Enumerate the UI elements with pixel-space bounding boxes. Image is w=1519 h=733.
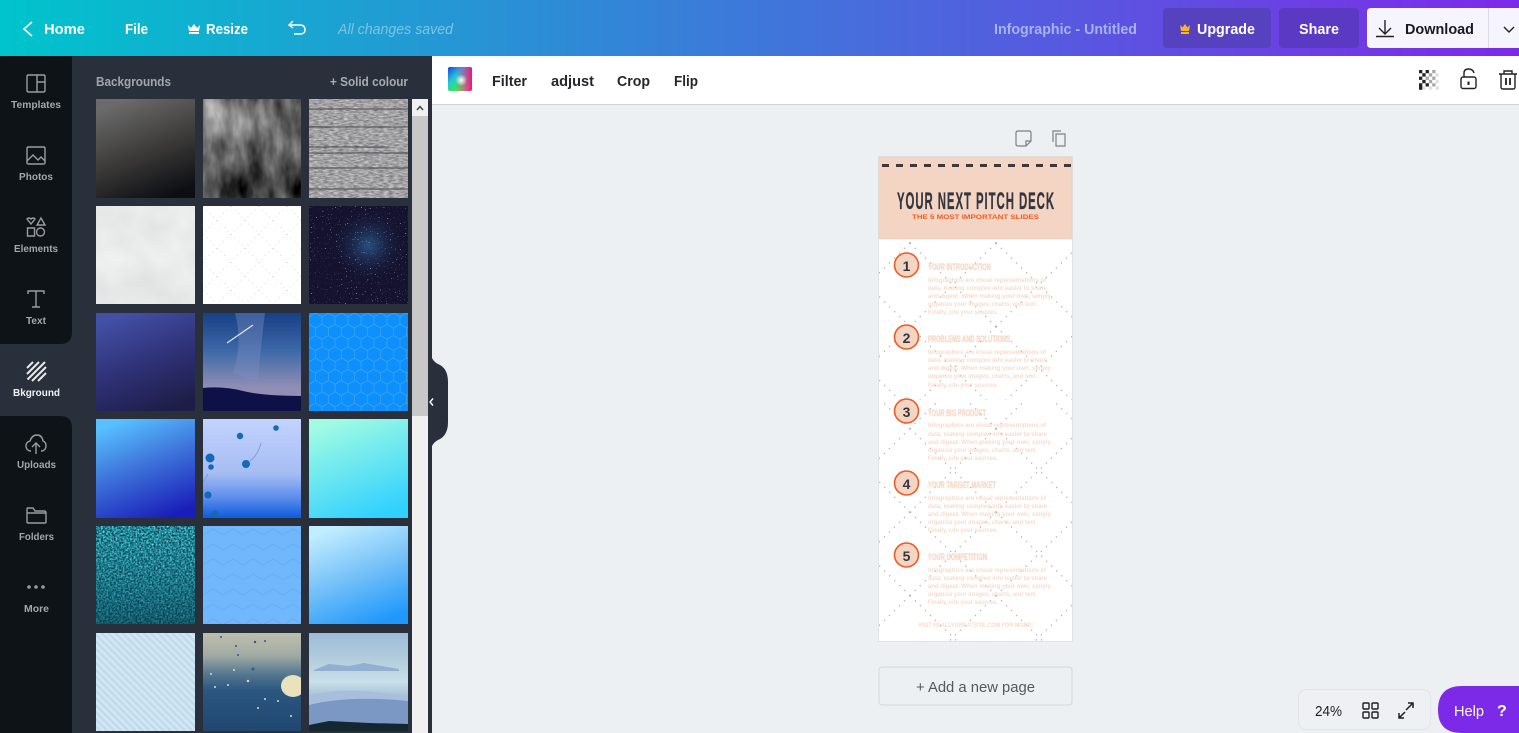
upgrade button: Upgrade (1197, 22, 1255, 38)
icon: text (28, 291, 44, 307)
share button: Share (1299, 22, 1339, 38)
infographic canvas (878, 156, 1072, 642)
thumb: wood planks (309, 99, 408, 198)
thumb: pale stripes (96, 633, 195, 731)
step 4: YOUR TARGET MARKET (928, 480, 996, 491)
subtitle: THE 5 MOST IMPORTANT SLIDES (912, 214, 1040, 221)
step 4: organize your images, charts, and text. (928, 519, 1037, 526)
templates label: Templates (11, 99, 61, 111)
panel collapse handle (430, 358, 448, 446)
thumb: jellyfish (203, 419, 301, 518)
icon: fullscreen (1399, 703, 1413, 718)
icon: elements (27, 218, 45, 236)
help button: Help (1454, 704, 1484, 720)
icon: grid view (1363, 703, 1378, 718)
thumb: white marble (96, 206, 195, 304)
left sidebar (0, 56, 72, 733)
zoom level: 24% (1315, 704, 1342, 720)
step 5: and digest. When making your own, simply (928, 583, 1052, 590)
folders label: Folders (19, 531, 54, 543)
step 4: Finally, cite your sources. (928, 527, 998, 534)
step 4: data, making complex info easier to share (928, 503, 1048, 510)
step 2: organize your images, charts, and text. (928, 373, 1037, 380)
step 1: data, making complex info easier to share (928, 285, 1048, 292)
background thumbnail grid (96, 99, 408, 731)
thumb: misty mountains (309, 633, 408, 731)
image toolbar (432, 56, 1519, 105)
step 3: 3 (903, 404, 911, 420)
step 5: organize your images, charts, and text. (928, 591, 1037, 598)
icon: photos (27, 147, 45, 164)
infographic canvas: YOUR NEXT PITCH DECK (897, 188, 1055, 215)
resize menu: Resize (206, 22, 248, 38)
icon: back chevron (24, 22, 32, 36)
thumb: grey clouds (203, 99, 301, 198)
dashed rule (882, 164, 1072, 167)
zoom controls (1298, 690, 1430, 730)
add a new page button (879, 667, 1072, 705)
top navigation bar (0, 0, 1519, 56)
document title: Infographic - Untitled (994, 22, 1137, 38)
icon: templates (27, 75, 45, 92)
icon: uploads (26, 435, 46, 454)
step 2 (894, 325, 1052, 389)
panel scrollbar (412, 99, 428, 733)
step 4: Infographics are visual representations of (928, 495, 1047, 502)
step 2: and digest. When making your own, simply (928, 365, 1052, 372)
step 1: Finally, cite your sources. (928, 309, 998, 316)
icon: undo arrow (289, 21, 305, 34)
thumb: raindrops (203, 633, 301, 731)
icon: lock (1461, 69, 1476, 88)
step 3: and digest. When making your own, simply (928, 439, 1052, 446)
step 4: and digest. When making your own, simply (928, 511, 1052, 518)
step 2: PROBLEMS AND SOLUTIONS (928, 334, 1010, 345)
thumb: starfield (309, 206, 408, 304)
icon: duplicate page (1053, 131, 1065, 146)
thumb: dark gradient (96, 99, 195, 198)
step 2: data, making complex info easier to share (928, 357, 1048, 364)
thumb: night sky with hill (203, 313, 301, 411)
thumb: sky gradient (309, 526, 408, 624)
download button (1367, 8, 1519, 48)
step 3: Finally, cite your sources. (928, 455, 998, 462)
solid colour link: + Solid colour (330, 74, 408, 89)
thumb: teal sparkle water (96, 526, 195, 624)
thumb: light blue chevrons (203, 526, 301, 624)
thumb: blue hexagons (309, 313, 408, 411)
filter button: Filter (492, 74, 527, 90)
step 1: organize your images, charts, and text. (928, 301, 1037, 308)
thumb: aqua gradient (309, 419, 408, 518)
thumb: blue gradient (96, 419, 195, 518)
step 5: YOUR COMPETITION (928, 552, 987, 563)
icon: trash (1499, 71, 1517, 89)
backgrounds heading: Backgrounds (96, 74, 171, 89)
flip button: Flip (674, 74, 698, 90)
step 5: Infographics are visual representations of (928, 567, 1047, 574)
save status: All changes saved (337, 22, 454, 38)
icon: folders (27, 508, 46, 523)
step 2: 2 (903, 330, 911, 346)
step 5 (894, 543, 1052, 606)
step 3: YOUR BIG PRODUCT (928, 408, 986, 419)
icon: transparency checker (1419, 70, 1439, 90)
step 5: Finally, cite your sources. (928, 599, 998, 606)
icon: background stripes (27, 362, 46, 381)
add a new page button: + Add a new page (916, 680, 1035, 696)
step 1: Infographics are visual representations of (928, 277, 1047, 284)
step 1 (894, 253, 1052, 316)
thumb: white diamonds (203, 206, 301, 304)
step 2: Finally, cite your sources. (928, 382, 998, 389)
step 3: Infographics are visual representations of (928, 422, 1047, 429)
uploads label: Uploads (17, 459, 56, 471)
header band (879, 157, 1072, 239)
step 1: and digest. When making your own, simply (928, 293, 1052, 300)
step 5: data, making complex info easier to share (928, 575, 1048, 582)
file menu: File (125, 22, 148, 38)
step 3: data, making complex info easier to share (928, 431, 1048, 438)
icon: resize crown (188, 24, 200, 34)
step 3 (894, 399, 1052, 462)
dotted diamond background (879, 239, 1072, 641)
step 5: 5 (903, 548, 911, 564)
elements label: Elements (14, 243, 58, 255)
step 4: 4 (903, 476, 911, 492)
home link: Home (44, 22, 85, 38)
help button (1438, 686, 1519, 733)
text label: Text (26, 315, 46, 327)
bkground label: Bkground (13, 387, 60, 399)
step 1: YOUR INTRODUCTION (928, 262, 991, 273)
footer link: VISIT REALLYGREATSITE.COM FOR MORE! (918, 622, 1033, 629)
background panel (0, 56, 432, 733)
upgrade button (1163, 8, 1271, 48)
step 4 (894, 471, 1052, 534)
step 2: Infographics are visual representations of (928, 349, 1047, 356)
icon: page note (1016, 131, 1031, 146)
photos label: Photos (19, 171, 53, 183)
step 3: organize your images, charts, and text. (928, 447, 1037, 454)
icon: colour swatch (448, 67, 472, 91)
thumb: indigo gradient (96, 313, 195, 411)
more label: More (24, 603, 49, 615)
crop button: Crop (617, 74, 650, 90)
download button: Download (1405, 22, 1474, 38)
share button (1279, 8, 1359, 48)
step 1: 1 (903, 258, 911, 274)
adjust button: adjust (551, 74, 594, 90)
help button: ? (1497, 703, 1507, 720)
icon: more dots (27, 585, 45, 589)
